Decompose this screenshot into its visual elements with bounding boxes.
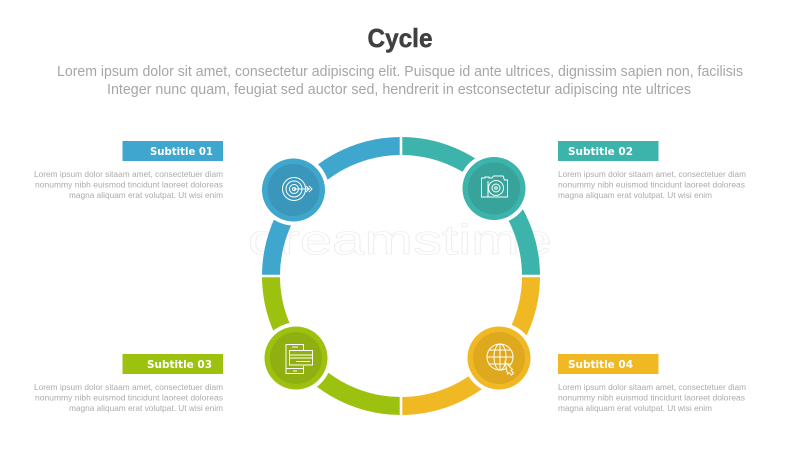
intro text <box>57 63 743 98</box>
node: yellow globe <box>464 322 534 394</box>
icon: camera <box>482 176 508 197</box>
body text 01: Lorem ipsum dolor sitaam amet, consectetuer diam <box>34 169 223 179</box>
body text 04: nonummy nibh euismod tincidunt laoreet doloreas <box>558 392 745 402</box>
body text 02: nonummy nibh euismod tincidunt laoreet doloreas <box>558 180 745 190</box>
body text 01: nonummy nibh euismod tincidunt laoreet doloreas <box>35 180 223 190</box>
label text 04: Subtitle 04 <box>568 359 633 371</box>
label text 01: Subtitle 01 <box>150 146 213 158</box>
ring segment: blue <box>271 146 401 276</box>
body text 01: magna aliquam erat volutpat. Ut wisi enim <box>69 190 223 200</box>
icon: globe with cursor <box>487 344 514 375</box>
panel: subtitle 03 <box>34 354 223 413</box>
ring segment: yellow <box>401 276 531 406</box>
label bar 03 <box>122 354 223 374</box>
icon: payment card on phone <box>286 344 312 374</box>
label bar 01 <box>122 141 223 161</box>
panel: subtitle 04 <box>558 354 746 413</box>
body text 04 <box>558 382 746 413</box>
ring segment: green <box>271 276 401 406</box>
body text 04: magna aliquam erat volutpat. Ut wisi enim <box>558 403 712 413</box>
intro text: Lorem ipsum dolor sit amet, consectetur adipiscing elit. Puisque id ante ultrices, dignissim sapien non, facilisis <box>57 63 743 80</box>
node: green card <box>260 322 332 394</box>
panel: subtitle 02 <box>558 141 746 200</box>
label text 02: Subtitle 02 <box>568 146 633 158</box>
body text 04: Lorem ipsum dolor sitaam amet, consectetuer diam <box>558 382 746 392</box>
ring gaps <box>257 132 545 420</box>
body text 02 <box>558 169 746 200</box>
intro text: Integer nunc quam, feugiat sed auctor sed, hendrerit in estconsectetur adipiscing nte ultrices <box>107 81 691 98</box>
ring segment: teal <box>401 146 531 276</box>
body text 02: magna aliquam erat volutpat. Ut wisi enim <box>558 190 712 200</box>
label text 03: Subtitle 03 <box>147 359 212 371</box>
label bar 02 <box>558 141 658 161</box>
icon: target <box>282 178 312 200</box>
body text 03 <box>34 382 223 413</box>
body text 03: magna aliquam erat volutpat. Ut wisi enim <box>69 403 223 413</box>
body text 03: Lorem ipsum dolor sitaam amet, consectetuer diam <box>34 382 223 392</box>
body text 01 <box>34 169 223 200</box>
panel: subtitle 01 <box>34 141 223 200</box>
label bar 04 <box>558 354 658 374</box>
node: blue target <box>258 154 329 226</box>
node: teal camera <box>458 153 530 224</box>
body text 03: nonummy nibh euismod tincidunt laoreet doloreas <box>35 392 223 402</box>
title: Cycle <box>368 23 432 53</box>
body text 02: Lorem ipsum dolor sitaam amet, consectetuer diam <box>558 169 746 179</box>
cycle ring <box>271 146 531 406</box>
watermark: dreamstime <box>248 216 552 263</box>
